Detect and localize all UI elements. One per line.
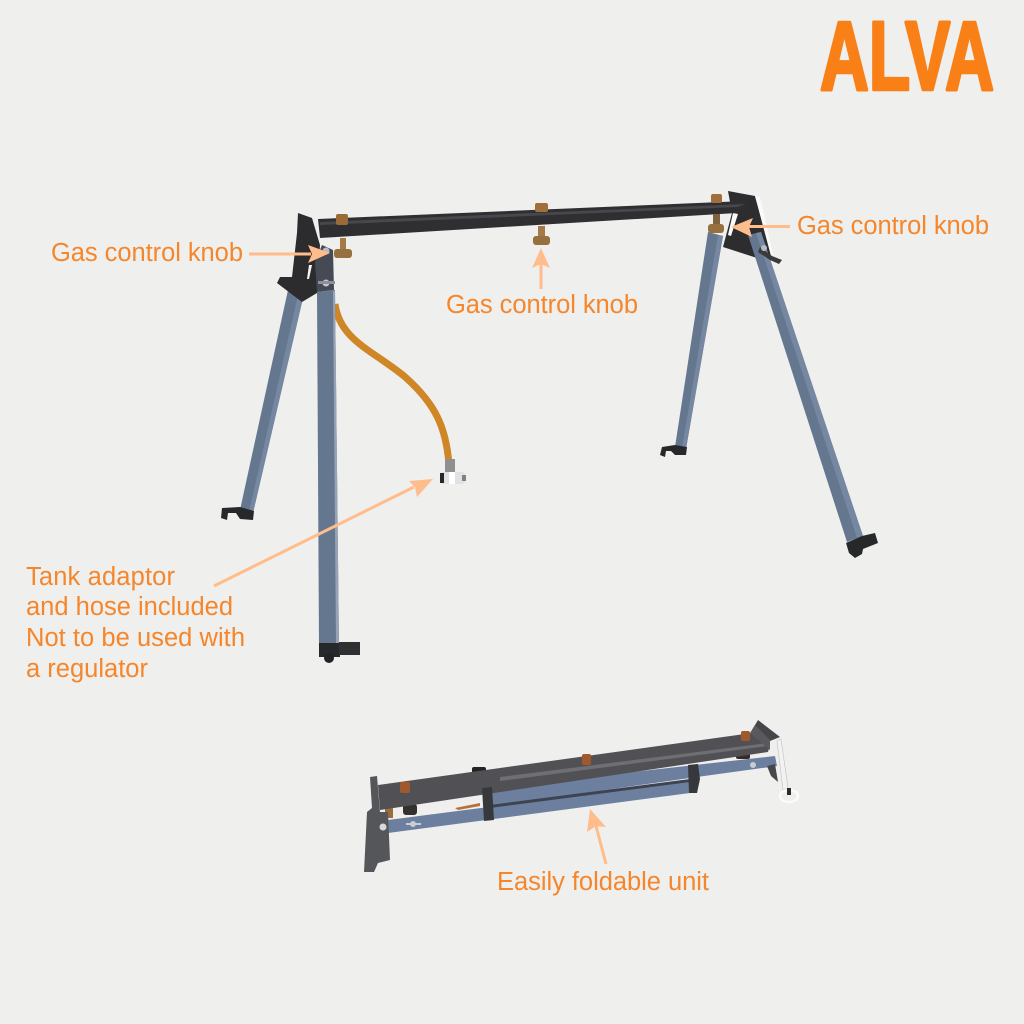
tank adaptor [440, 459, 466, 484]
label: centre gas control knob: Gas control knob [446, 291, 638, 319]
right bracket [723, 191, 773, 258]
centre knob [533, 203, 550, 245]
right inner foot [660, 445, 687, 457]
hose [335, 304, 449, 464]
straps [482, 764, 700, 821]
folded stand product image [364, 720, 798, 872]
label: right gas control knob: Gas control knob [797, 212, 989, 240]
right clasp [777, 739, 798, 802]
wing nuts [406, 762, 756, 827]
right bracket hardware [758, 245, 782, 264]
left bracket [277, 213, 320, 302]
label: easily foldable unit: Easily foldable unit [497, 868, 709, 896]
small knobs [400, 731, 750, 793]
left knob [334, 214, 352, 258]
folded upper bar [490, 756, 777, 806]
right knob [708, 194, 724, 233]
left back foot [221, 507, 254, 520]
front leg [317, 290, 339, 645]
left plate with bolts [315, 245, 335, 292]
top beam [318, 201, 746, 238]
label: tank adaptor note: a regulator [26, 655, 148, 683]
left back leg [240, 290, 303, 513]
arrow: centre knob [532, 248, 550, 289]
foldable beam [378, 733, 770, 810]
label: left gas control knob: Gas control knob [51, 239, 243, 267]
under-beam fittings [385, 751, 750, 818]
right outer leg [748, 232, 863, 542]
left end bracket [364, 776, 390, 872]
arrow: foldable unit [587, 809, 606, 864]
arrow: right knob [731, 218, 790, 237]
label: tank adaptor note: Not to be used with [26, 624, 245, 652]
right outer foot [846, 533, 878, 558]
front foot [319, 642, 360, 663]
label: tank adaptor note: and hose included [26, 593, 233, 621]
right inner leg [675, 232, 723, 449]
right end bracket [750, 720, 780, 782]
small dark catch [472, 767, 486, 773]
arrow: left knob [249, 245, 330, 263]
label: tank adaptor note: Tank adaptor [26, 563, 176, 591]
unfolded stand product image [221, 191, 878, 663]
arrow: tank adaptor [214, 479, 433, 586]
folded lower bar [388, 779, 690, 833]
label: tank adaptor note [26, 563, 245, 683]
